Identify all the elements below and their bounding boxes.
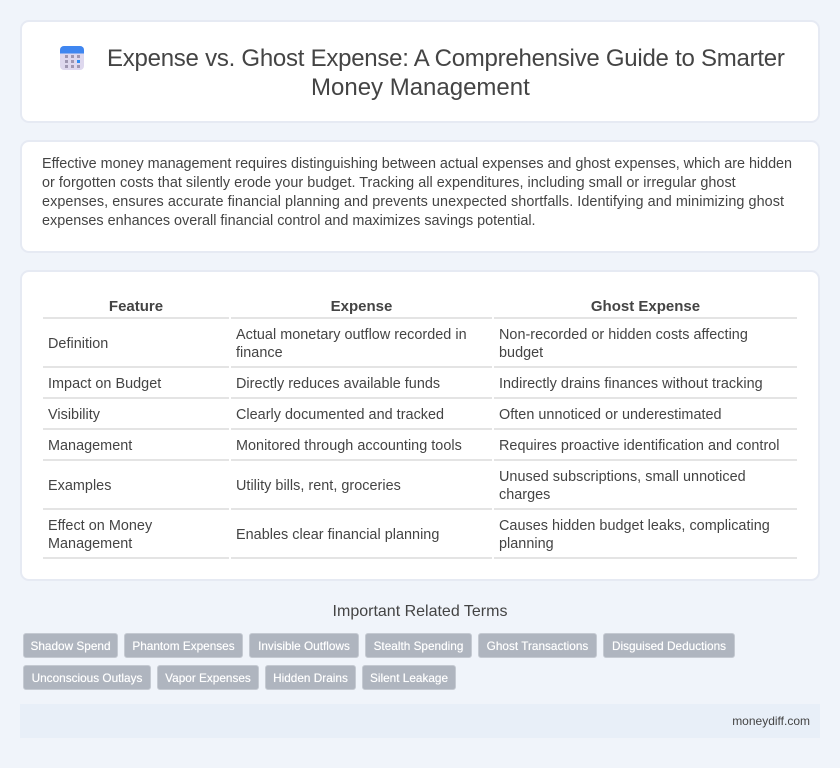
icon: calendar [60, 46, 84, 70]
related term tags: Ghost Transactions [487, 639, 588, 653]
comparison table: planning [499, 536, 554, 552]
comparison table: Clearly documented and tracked [236, 407, 444, 423]
comparison table: Requires proactive identification and control [499, 438, 780, 454]
comparison table [43, 298, 797, 559]
comparison table: Indirectly drains finances without tracking [499, 376, 763, 392]
header: Ghost Expense: Ghost Expense [591, 298, 700, 315]
footer bar [20, 704, 820, 738]
intro text: expenses, ensures accurate financial planning and prevents unexpected shortfalls. Identifying and minimizing ghost [42, 194, 784, 210]
header: Feature: Feature [109, 298, 163, 315]
related term tags: Hidden Drains [273, 671, 348, 685]
comparison table: Impact on Budget [48, 376, 161, 392]
comparison table: Monitored through accounting tools [236, 438, 462, 454]
comparison table: Unused subscriptions, small unnoticed [499, 469, 746, 485]
related terms heading: Important Related Terms [333, 603, 507, 620]
related term tags [23, 633, 735, 690]
comparison table: Effect on Money [48, 518, 152, 534]
intro text: Effective money management requires distinguishing between actual expenses and ghost expenses, which are hidden [42, 156, 792, 172]
comparison table: Non-recorded or hidden costs affecting [499, 327, 748, 343]
footer source text: moneydiff.com [732, 714, 810, 728]
intro text: or forgotten costs that silently erode your budget. Tracking all expenditures, including small or irregular ghost [42, 175, 736, 191]
comparison table: Actual monetary outflow recorded in [236, 327, 467, 343]
related term tags: Unconscious Outlays [32, 671, 142, 685]
intro text: expenses enhances overall financial control and maximizes savings potential. [42, 213, 536, 229]
comparison table: Directly reduces available funds [236, 376, 440, 392]
comparison table: finance [236, 345, 283, 361]
comparison table: Definition [48, 336, 108, 352]
related term tags: Invisible Outflows [258, 639, 350, 653]
title line 1: Expense vs. Ghost Expense: A Comprehensive Guide to Smarter [107, 45, 785, 72]
comparison table: Causes hidden budget leaks, complicating [499, 518, 770, 534]
related term tags: Phantom Expenses [132, 639, 235, 653]
related term tags: Silent Leakage [370, 671, 448, 685]
title line 2: Money Management [311, 74, 530, 101]
comparison table: Enables clear financial planning [236, 527, 439, 543]
related term tags: Disguised Deductions [612, 639, 726, 653]
intro text [42, 156, 792, 229]
comparison table: Management [48, 438, 132, 454]
comparison table: Utility bills, rent, groceries [236, 478, 401, 494]
header: Expense: Expense [331, 298, 392, 315]
comparison table: budget [499, 345, 543, 361]
related term tags: Stealth Spending [374, 639, 463, 653]
comparison table: Examples [48, 478, 111, 494]
panel: introduction [20, 140, 820, 253]
panel: comparison table [20, 270, 820, 581]
related term tags: Vapor Expenses [165, 671, 251, 685]
related term tags: Shadow Spend [30, 639, 111, 653]
panel: title header [20, 20, 820, 123]
comparison table: Often unnoticed or underestimated [499, 407, 722, 423]
comparison table: Management [48, 536, 132, 552]
comparison table: Visibility [48, 407, 100, 423]
comparison table: charges [499, 487, 550, 503]
